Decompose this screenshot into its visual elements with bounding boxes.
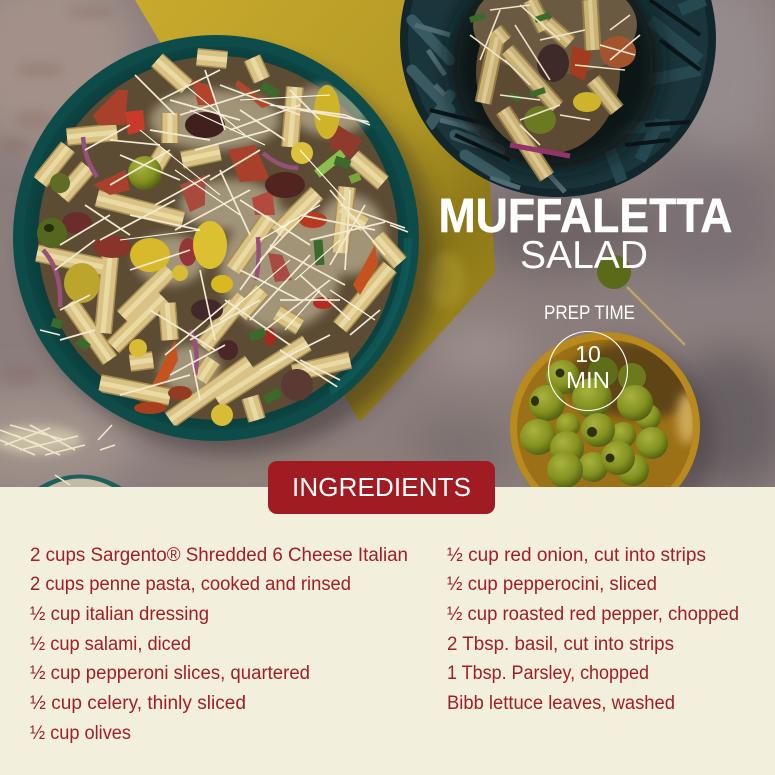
ingredients list: left column: ½ cup italian dressing	[30, 604, 209, 625]
red onion	[43, 137, 298, 375]
ingredients list: left column: ½ cup salami, diced	[30, 634, 191, 655]
ingredients list: right column: 2 Tbsp. basil, cut into strips	[447, 634, 674, 655]
ingredients list: right column: ½ cup roasted red pepper, chopped	[447, 604, 739, 625]
celery and basil	[52, 85, 360, 400]
ingredients list: right column: ½ cup pepperocini, sliced	[447, 574, 657, 595]
yellow napkin	[135, 0, 495, 422]
cheese pile and small dish lower left	[0, 425, 122, 487]
title	[438, 190, 732, 277]
cream ingredients panel	[0, 487, 775, 775]
title: SALAD	[520, 234, 648, 277]
title: MUFFALETTA	[438, 190, 732, 243]
ingredients heading pill	[268, 461, 495, 514]
ingredients list: left column: ½ cup celery, thinly sliced	[30, 693, 246, 714]
ingredients list: right column: 1 Tbsp. Parsley, chopped	[447, 663, 649, 684]
pasta salad in bowl	[37, 56, 405, 426]
large teal bowl	[13, 35, 419, 441]
yellow bowl of olives	[510, 332, 716, 487]
prep time badge: MIN	[566, 367, 610, 393]
yellow peppers	[64, 85, 340, 426]
ingredients list: left column: 2 cups penne pasta, cooked and rinsed	[30, 574, 351, 595]
salami and pepper pieces	[62, 80, 378, 414]
ingredients list: right column: Bibb lettuce leaves, washed	[447, 693, 675, 714]
stray cheese over rim	[40, 115, 408, 335]
dark teal plate with salad	[400, 0, 716, 197]
ingredients list: right column	[447, 545, 739, 714]
ingredients list: right column: ½ cup red onion, cut into strips	[447, 545, 706, 566]
food photograph background	[0, 0, 775, 536]
shredded cheese	[55, 70, 405, 400]
ingredients list: left column: 2 cups Sargento® Shredded 6 Cheese Italian	[30, 545, 408, 566]
ingredients heading pill: INGREDIENTS	[292, 472, 471, 502]
prep time badge	[544, 303, 635, 410]
cheese haze	[135, 85, 385, 395]
olives	[37, 112, 313, 401]
ingredients list: left column: ½ cup olives	[30, 723, 131, 744]
prep time badge: PREP TIME	[544, 303, 635, 324]
prep time badge: 10	[575, 341, 601, 367]
countertop mottling	[4, 8, 106, 382]
olive on a pick	[597, 255, 685, 345]
ingredients list: left column	[30, 545, 408, 744]
large teal bowl shadow	[27, 54, 437, 454]
ingredients list: left column: ½ cup pepperoni slices, quartered	[30, 663, 310, 684]
